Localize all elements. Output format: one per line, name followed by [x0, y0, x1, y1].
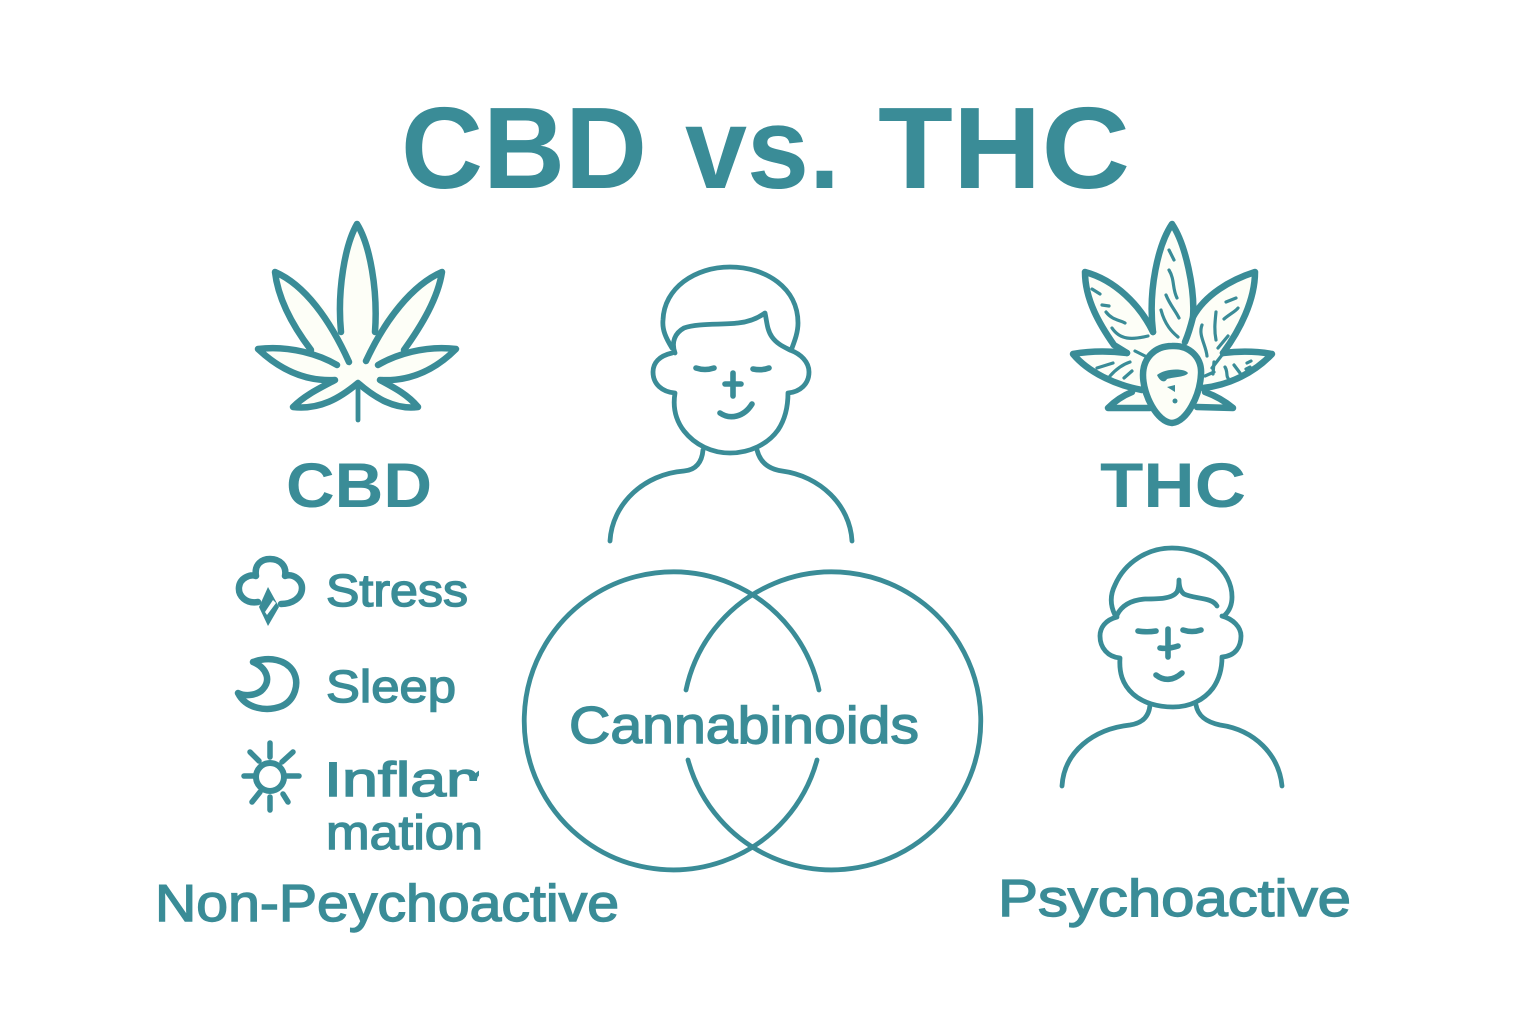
- icon: CBD leaf: [258, 224, 456, 420]
- venn label: Cannabinoids: [569, 697, 919, 755]
- venn diagram: [524, 572, 981, 870]
- title: [401, 83, 1130, 213]
- benefit: sleep: Sleep: [326, 661, 456, 712]
- icon: calm person: [610, 267, 852, 541]
- benefit: inflammation: [324, 754, 509, 860]
- panel: THC: [998, 223, 1351, 928]
- icon: inflammation sun: [244, 743, 299, 810]
- title: vs.: [685, 83, 840, 213]
- panel: CBD: [155, 224, 619, 933]
- non-psychoactive label: Non-Peychoactive: [155, 875, 619, 933]
- icon: stress cloud: [239, 559, 302, 626]
- CBD label: CBD: [286, 451, 432, 521]
- icon: THC leaf with face: [1073, 223, 1272, 423]
- benefit: inflammation: mation: [326, 807, 483, 860]
- panel: center person and venn: [524, 267, 981, 870]
- title: CBD: [401, 83, 647, 213]
- icon: sleep moon: [238, 659, 296, 709]
- icon: psychoactive person: [1062, 548, 1282, 786]
- benefit: inflammation: Inflam: [324, 754, 500, 807]
- THC label: THC: [1100, 451, 1246, 521]
- psychoactive label: Psychoactive: [998, 870, 1351, 928]
- title: THC: [878, 83, 1130, 213]
- benefit: stress: Stress: [326, 565, 468, 616]
